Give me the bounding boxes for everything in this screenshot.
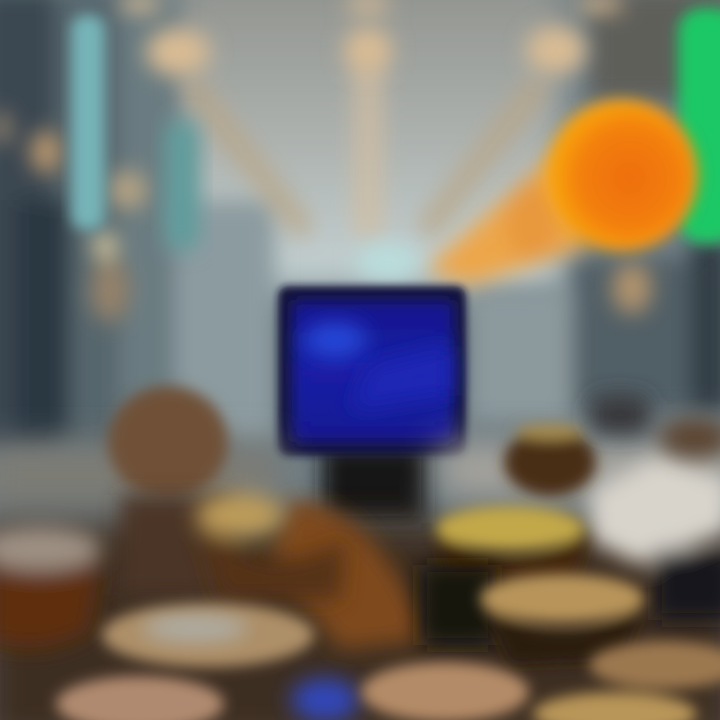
person head left [108, 386, 228, 498]
glow above monitor [356, 244, 420, 280]
green column right [678, 8, 720, 243]
orange glowing circle [546, 99, 698, 251]
ceiling perspective beams [195, 70, 535, 225]
plate bottom left [56, 676, 224, 720]
bowl centre top [195, 493, 345, 600]
bowl yellow [435, 506, 590, 585]
white shirt figure right [590, 455, 720, 620]
teal column left [71, 15, 105, 230]
teal column middle [165, 120, 199, 250]
mid floor tones [0, 445, 720, 720]
monitor [278, 286, 466, 523]
blue cup bottom [291, 678, 359, 720]
monitor screen [292, 300, 454, 442]
dark under yellow bowl [420, 565, 495, 645]
bowl back right [504, 424, 596, 496]
bowl left [0, 526, 102, 648]
plate bottom centre [361, 662, 529, 720]
screen band [350, 345, 450, 410]
orange comet trail [425, 150, 590, 285]
bowl mid right [480, 574, 645, 665]
plate bottom right [533, 641, 720, 720]
person shoulder centre [120, 495, 428, 650]
plate centre [102, 603, 314, 667]
monitor stand [322, 445, 428, 523]
left dark columns [0, 0, 275, 450]
screen highlight [303, 322, 367, 358]
ceiling lights [0, 0, 652, 322]
monitor frame [278, 286, 466, 456]
right dark columns [470, 0, 720, 420]
bowl far right [590, 395, 720, 458]
